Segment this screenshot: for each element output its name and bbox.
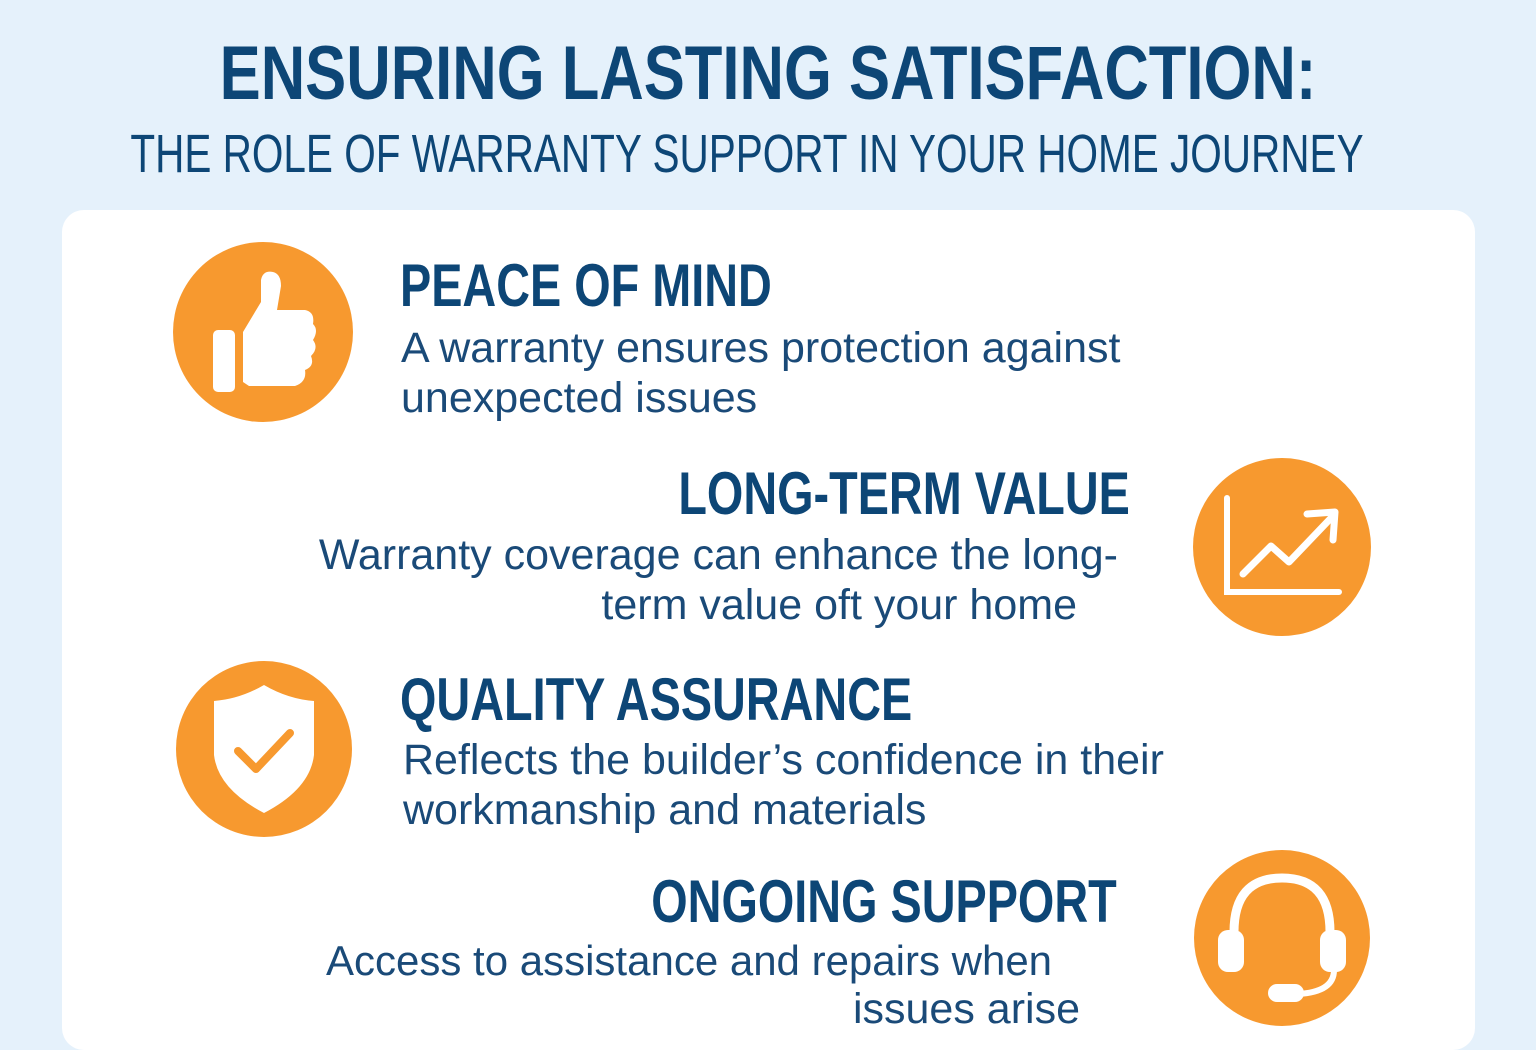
text: peace of mind: unexpected issues bbox=[401, 374, 757, 422]
icon: thumbs up bbox=[173, 242, 353, 422]
text: long-term value line 2: term value oft your home bbox=[601, 581, 1077, 629]
panel: main card bbox=[62, 210, 1475, 1050]
heading: ongoing support: ONGOING SUPPORT bbox=[652, 868, 1117, 935]
icon: chart bbox=[1193, 458, 1371, 636]
icon: shield bbox=[176, 661, 352, 837]
text: ongoing support: Access to assistance and repairs when bbox=[326, 937, 1052, 984]
icon: headset bbox=[1194, 850, 1370, 1026]
text: quality assurance: Reflects the builder’s confidence in their bbox=[403, 736, 1164, 784]
heading: long-term value: LONG-TERM VALUE bbox=[678, 460, 1130, 527]
heading: peace of mind: PEACE OF MIND bbox=[400, 252, 772, 319]
heading: quality assurance: QUALITY ASSURANCE bbox=[400, 666, 912, 733]
text: peace of mind: A warranty ensures protection against bbox=[401, 324, 1120, 372]
subtitle: THE ROLE OF WARRANTY SUPPORT IN YOUR HOME JOURNEY bbox=[130, 124, 1364, 184]
text: quality assurance: workmanship and materials bbox=[403, 786, 926, 834]
text: long-term value: Warranty coverage can enhance the long- bbox=[319, 531, 1118, 579]
title: ENSURING LASTING SATISFACTION: bbox=[220, 31, 1316, 116]
text: ongoing support line 2: issues arise bbox=[853, 985, 1080, 1033]
text: quality assurance bbox=[403, 736, 1164, 834]
text: peace of mind bbox=[401, 324, 1120, 422]
